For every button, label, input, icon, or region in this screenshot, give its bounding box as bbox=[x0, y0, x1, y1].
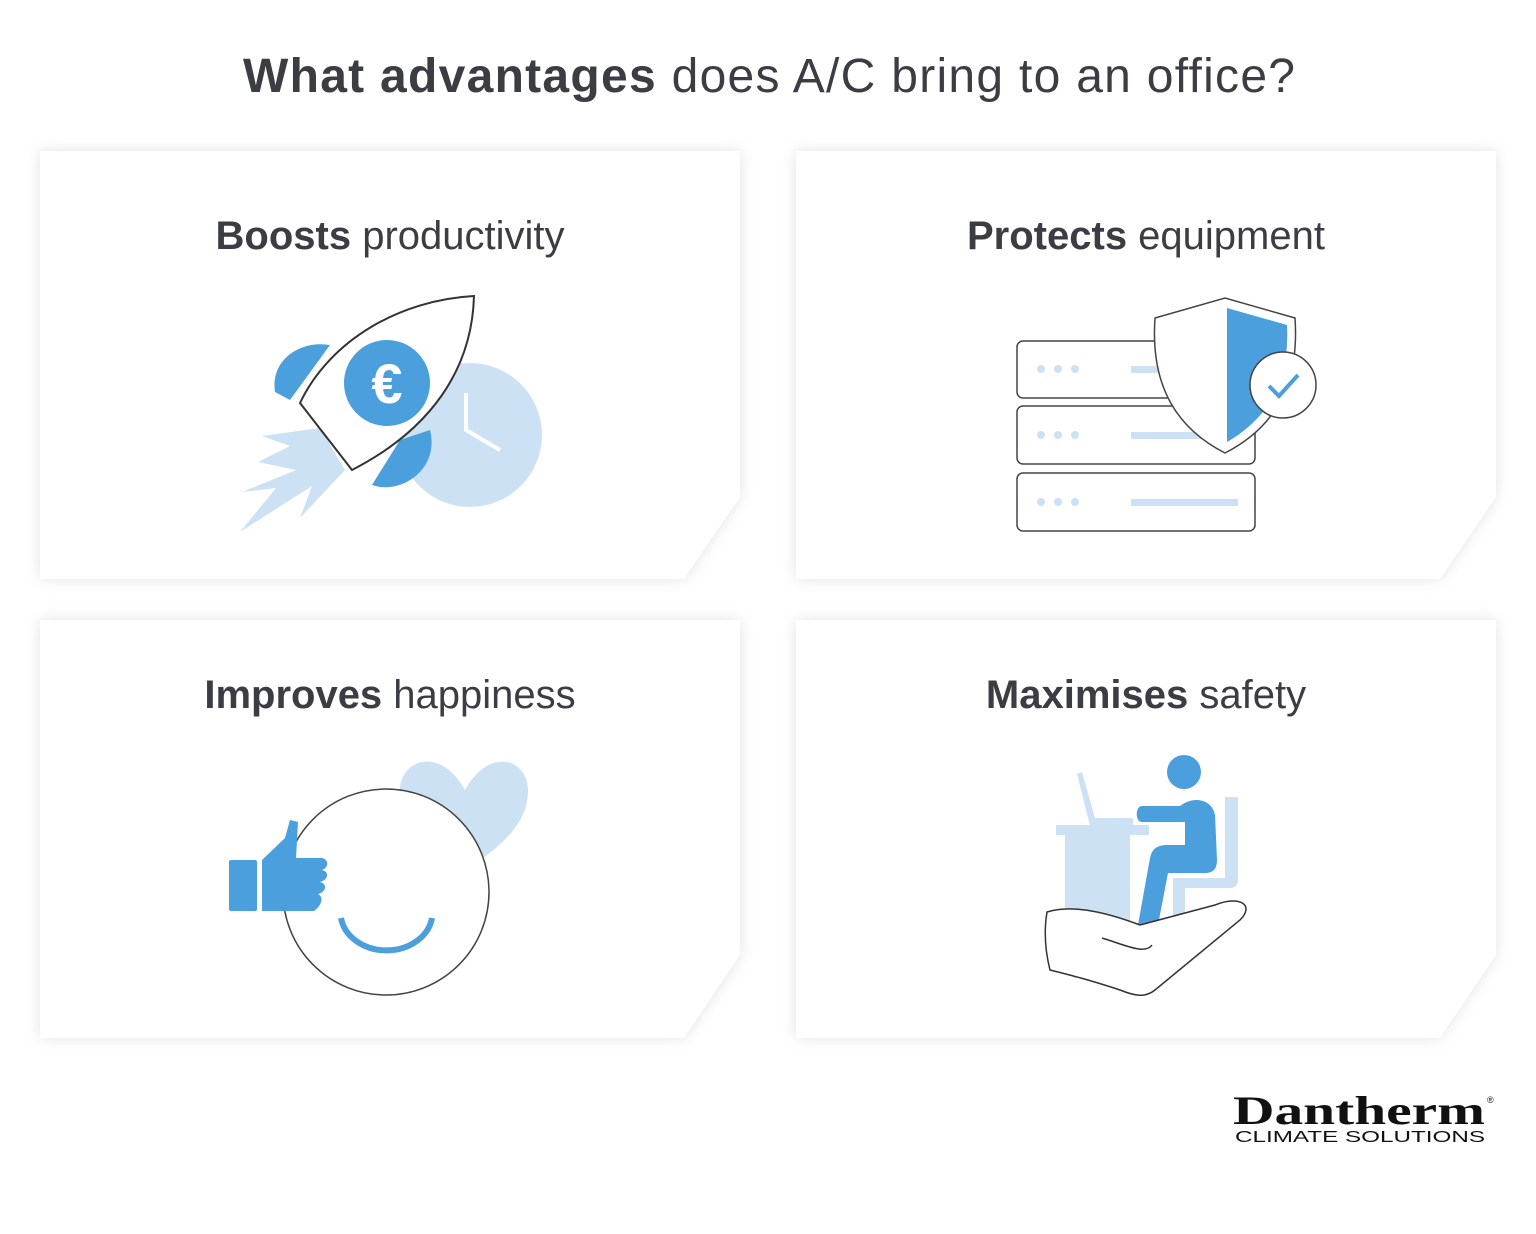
heading: boosts productivity: Boosts productivity bbox=[216, 214, 564, 258]
heading: protects equipment: Protects equipment bbox=[967, 214, 1325, 258]
icon: person at desk in hand bbox=[1045, 755, 1246, 995]
panel: boosts productivity bbox=[40, 151, 740, 579]
panel: improves happiness bbox=[40, 620, 740, 1038]
logo: Dantherm: CLIMATE SOLUTIONS bbox=[1235, 1129, 1485, 1146]
icon: smiley with thumbs up and heart bbox=[229, 762, 528, 995]
panel: maximises safety bbox=[796, 620, 1496, 1038]
heading: improves happiness: Improves happiness bbox=[204, 673, 576, 717]
heading: maximises safety: Maximises safety bbox=[986, 673, 1306, 717]
panel: protects equipment bbox=[796, 151, 1496, 579]
icon: servers and shield bbox=[1017, 298, 1316, 531]
logo: Dantherm bbox=[1233, 1088, 1494, 1146]
title: What advantages does A/C bring to an office? bbox=[243, 50, 1295, 103]
logo: Dantherm: ® bbox=[1487, 1095, 1494, 1105]
icon: rocket bbox=[240, 296, 542, 532]
icon: rocket: € bbox=[371, 352, 403, 415]
logo: Dantherm: Dantherm bbox=[1233, 1088, 1485, 1133]
